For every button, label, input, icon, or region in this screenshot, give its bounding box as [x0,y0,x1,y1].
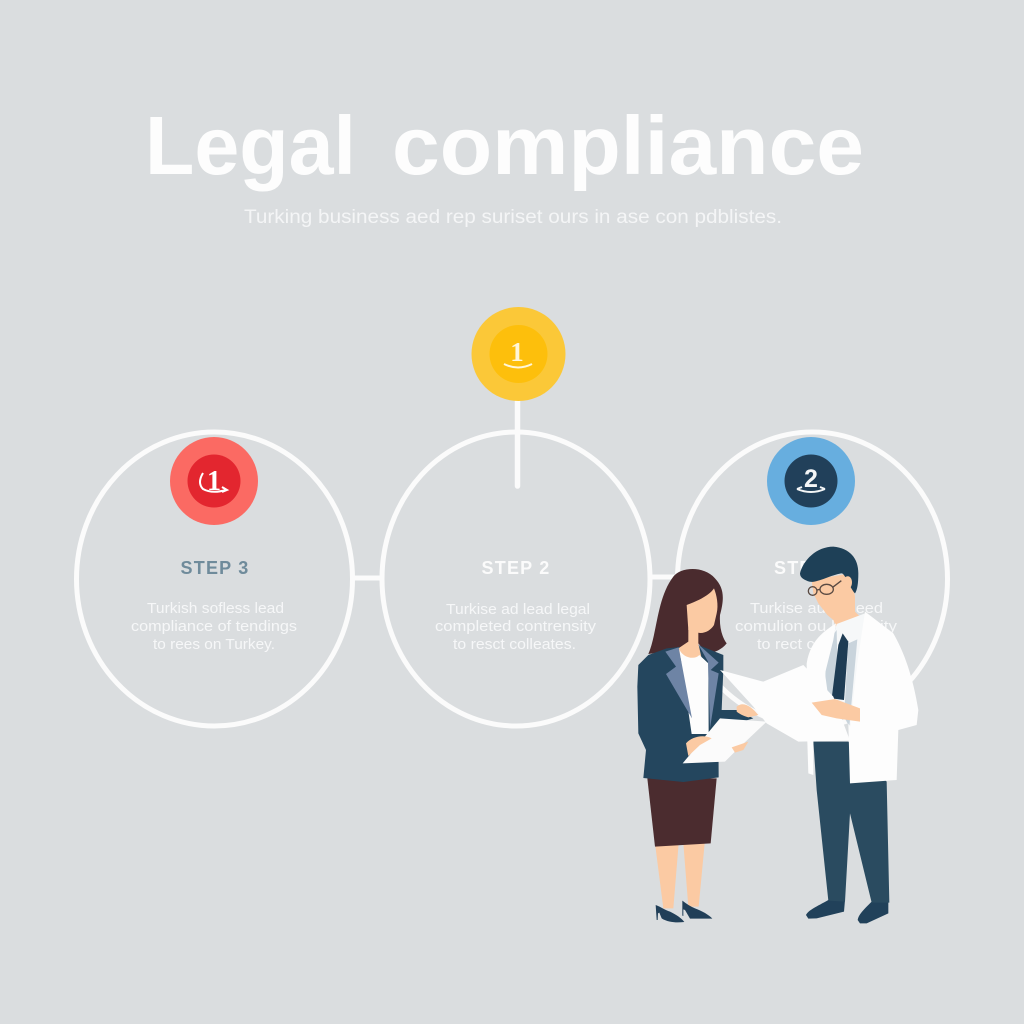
title: compliance [392,99,864,192]
connector: middle to right [650,574,677,580]
step 1 description: to rect colleates. [757,637,875,653]
step 3 description: compliance of tendings [131,619,297,635]
step 1 description [735,601,898,653]
woman face [687,588,717,633]
title: Legal [145,99,356,192]
woman legs [655,843,705,908]
panel: step 1 circle [678,432,948,726]
man shirt [824,613,865,727]
man [800,547,918,923]
step 2 description [435,602,597,653]
panel: step 2 circle [382,432,650,726]
step 3 description: Turkish sofless lead [147,601,284,617]
icon: blue badge 2: 2 [804,465,818,493]
step 1 heading: STEP 1 [774,558,843,578]
connector: left to middle [353,576,382,580]
icon: red badge 1: 1 [207,466,221,497]
step 3 heading: STEP 3 [181,558,249,578]
step 3 description: to rees on Turkey. [153,637,275,653]
woman [637,569,753,922]
woman shirt [679,649,709,734]
woman skirt [647,778,717,847]
man tie [832,633,848,700]
illustration: two colleagues reviewing documents [637,547,918,923]
hands [686,699,860,756]
man ear [844,576,852,589]
subtitle: Turking business aed rep suriset ours in ase con pdblistes. [244,207,782,228]
icon: yellow badge 1: 1 [510,337,524,367]
small document [683,718,767,763]
woman lapels [665,644,719,728]
woman blazer [637,645,753,782]
step 2 description: Turkise ad lead legal [446,602,590,618]
icon: red badge 1 [170,437,258,525]
man shoes [806,900,888,923]
large document [720,665,850,742]
connector: vertical from yellow badge [515,398,520,486]
icon: blue badge 2 [767,437,855,525]
step 3 description [131,601,297,653]
step 2 description: completed contrensity [435,619,597,635]
man hair [800,547,858,593]
man neck and face [812,573,863,637]
step 2 description: to resct colleates. [453,637,576,653]
panel: step 3 circle [76,432,352,726]
title [145,99,864,192]
woman neck [678,628,702,658]
man white coat [807,612,918,783]
icon: yellow badge 1 [472,307,566,401]
step 2 heading: STEP 2 [482,558,550,578]
step 1 description: comulion ou lecensity [735,619,898,635]
man glasses [808,581,841,595]
step 1 description: Turkise auled leed [750,601,883,617]
woman hair [648,569,727,654]
man trousers [813,742,889,903]
woman shoes [656,901,712,922]
